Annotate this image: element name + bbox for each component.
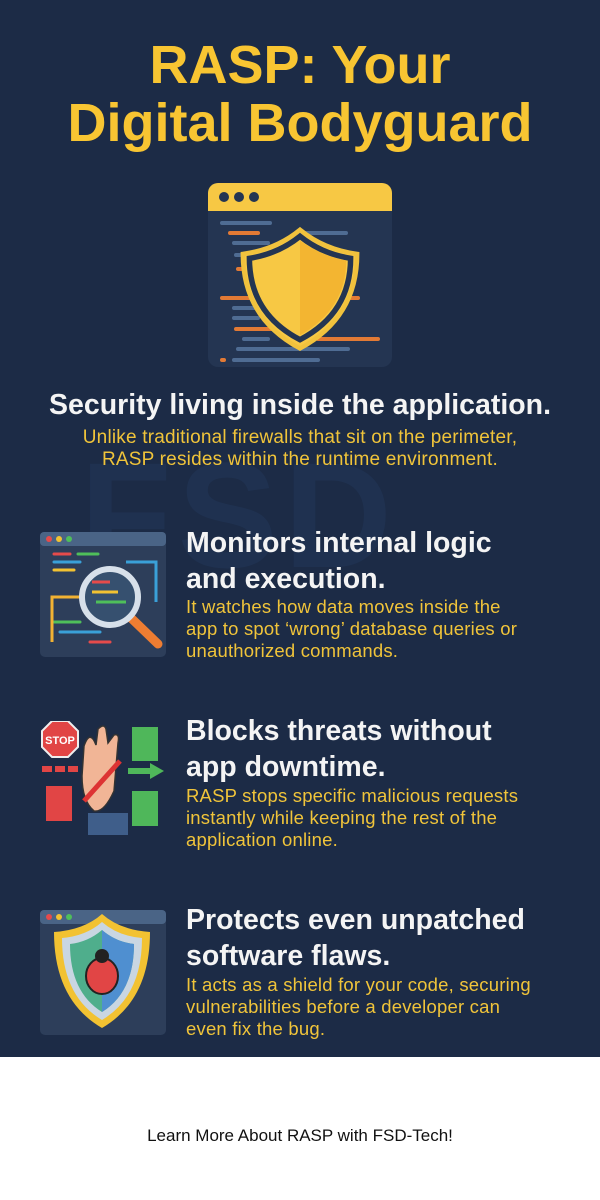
item 2: blocks (41, 715, 518, 850)
subtitle text: RASP resides within the runtime environment. (102, 449, 498, 470)
heading: Monitors internal logic (186, 527, 492, 559)
heading: security living inside: Security living inside the application. (49, 389, 551, 421)
body text (186, 596, 517, 661)
heading: Blocks threats without (186, 715, 492, 747)
body text: unauthorized commands. (186, 640, 398, 661)
heading (186, 527, 492, 595)
watermark: FSD: FSD (80, 431, 398, 599)
heading (186, 904, 525, 972)
heading (186, 715, 492, 783)
title: Digital Bodyguard (67, 93, 532, 153)
icon: stop hand: STOP (45, 735, 75, 747)
body text: application online. (186, 829, 338, 850)
heading: and execution. (186, 563, 386, 595)
body text (186, 974, 531, 1039)
icon: browser window with shield (208, 183, 392, 367)
heading: app downtime. (186, 751, 386, 783)
title: RASP: Your (149, 35, 451, 95)
body text: instantly while keeping the rest of the (186, 807, 497, 828)
body text (186, 785, 518, 850)
icon: shield with bug (40, 910, 166, 1035)
body text: RASP stops specific malicious requests (186, 785, 518, 806)
body text: app to spot ‘wrong’ database queries or (186, 618, 517, 639)
body text: It acts as a shield for your code, securing (186, 974, 531, 995)
subtitle text: Unlike traditional firewalls that sit on the perimeter, (83, 427, 517, 448)
body text: vulnerabilities before a developer can (186, 996, 500, 1017)
item 1: monitors (40, 527, 517, 661)
item 3: protects (40, 904, 531, 1039)
icon: stop hand (41, 721, 164, 835)
heading: Protects even unpatched (186, 904, 525, 936)
footer text: Learn More About RASP with FSD-Tech! (147, 1126, 453, 1145)
heading: software flaws. (186, 940, 390, 972)
body text: even fix the bug. (186, 1018, 325, 1039)
title (67, 35, 532, 153)
icon: code window with magnifier (40, 532, 166, 657)
body text: It watches how data moves inside the (186, 596, 501, 617)
subtitle text (83, 427, 517, 470)
